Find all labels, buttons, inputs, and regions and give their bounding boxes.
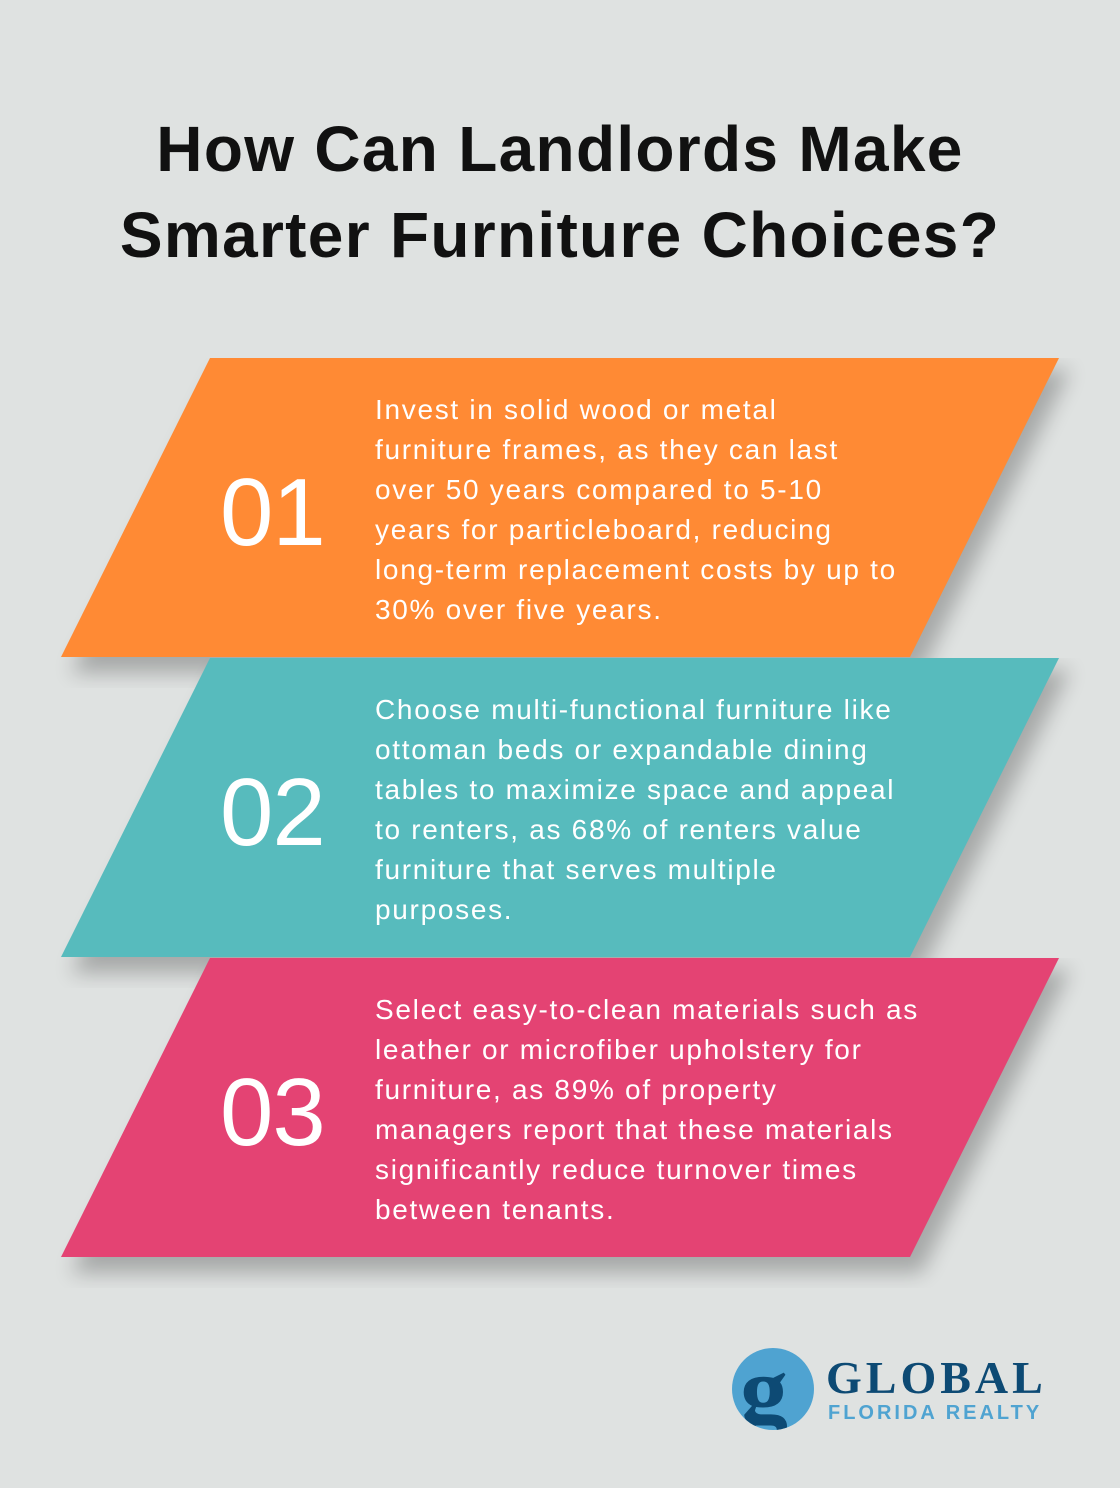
title: Smarter Furniture Choices?	[120, 199, 1000, 271]
panel: step 02	[61, 658, 1074, 983]
text 02: Choose multi-functional furniture like	[375, 694, 892, 725]
text 03: managers report that these materials	[375, 1114, 894, 1145]
number 02: 02	[220, 759, 325, 866]
icon: g circle	[732, 1348, 814, 1430]
text 01: Invest in solid wood or metal	[375, 394, 778, 425]
text 02: to renters, as 68% of renters value	[375, 814, 862, 845]
panel: step 03	[61, 958, 1074, 1283]
panel: step 01	[61, 358, 1074, 683]
title: How Can Landlords Make	[156, 113, 964, 185]
text 01: over 50 years compared to 5-10	[375, 474, 823, 505]
text 03: Select easy-to-clean materials such as	[375, 994, 919, 1025]
text 03: significantly reduce turnover times	[375, 1154, 858, 1185]
text 01: long-term replacement costs by up to	[375, 554, 897, 585]
logo: FLORIDA REALTY	[828, 1402, 1042, 1424]
number 01: 01	[220, 459, 325, 566]
title	[120, 113, 1000, 271]
text 02: furniture that serves multiple	[375, 854, 778, 885]
text 03: between tenants.	[375, 1194, 615, 1225]
text 02	[375, 694, 895, 925]
number 03: 03	[220, 1059, 325, 1166]
text 03: leather or microfiber upholstery for	[375, 1034, 863, 1065]
logo text: GLOBAL	[826, 1352, 1047, 1403]
text 02: purposes.	[375, 894, 513, 925]
text 02: ottoman beds or expandable dining	[375, 734, 869, 765]
text 03	[375, 994, 919, 1225]
text 01: years for particleboard, reducing	[375, 514, 833, 545]
text 02: tables to maximize space and appeal	[375, 774, 895, 805]
text 03: furniture, as 89% of property	[375, 1074, 778, 1105]
logo	[732, 1348, 1047, 1430]
text 01	[375, 394, 897, 625]
text 01: 30% over five years.	[375, 594, 663, 625]
text 01: furniture frames, as they can last	[375, 434, 839, 465]
